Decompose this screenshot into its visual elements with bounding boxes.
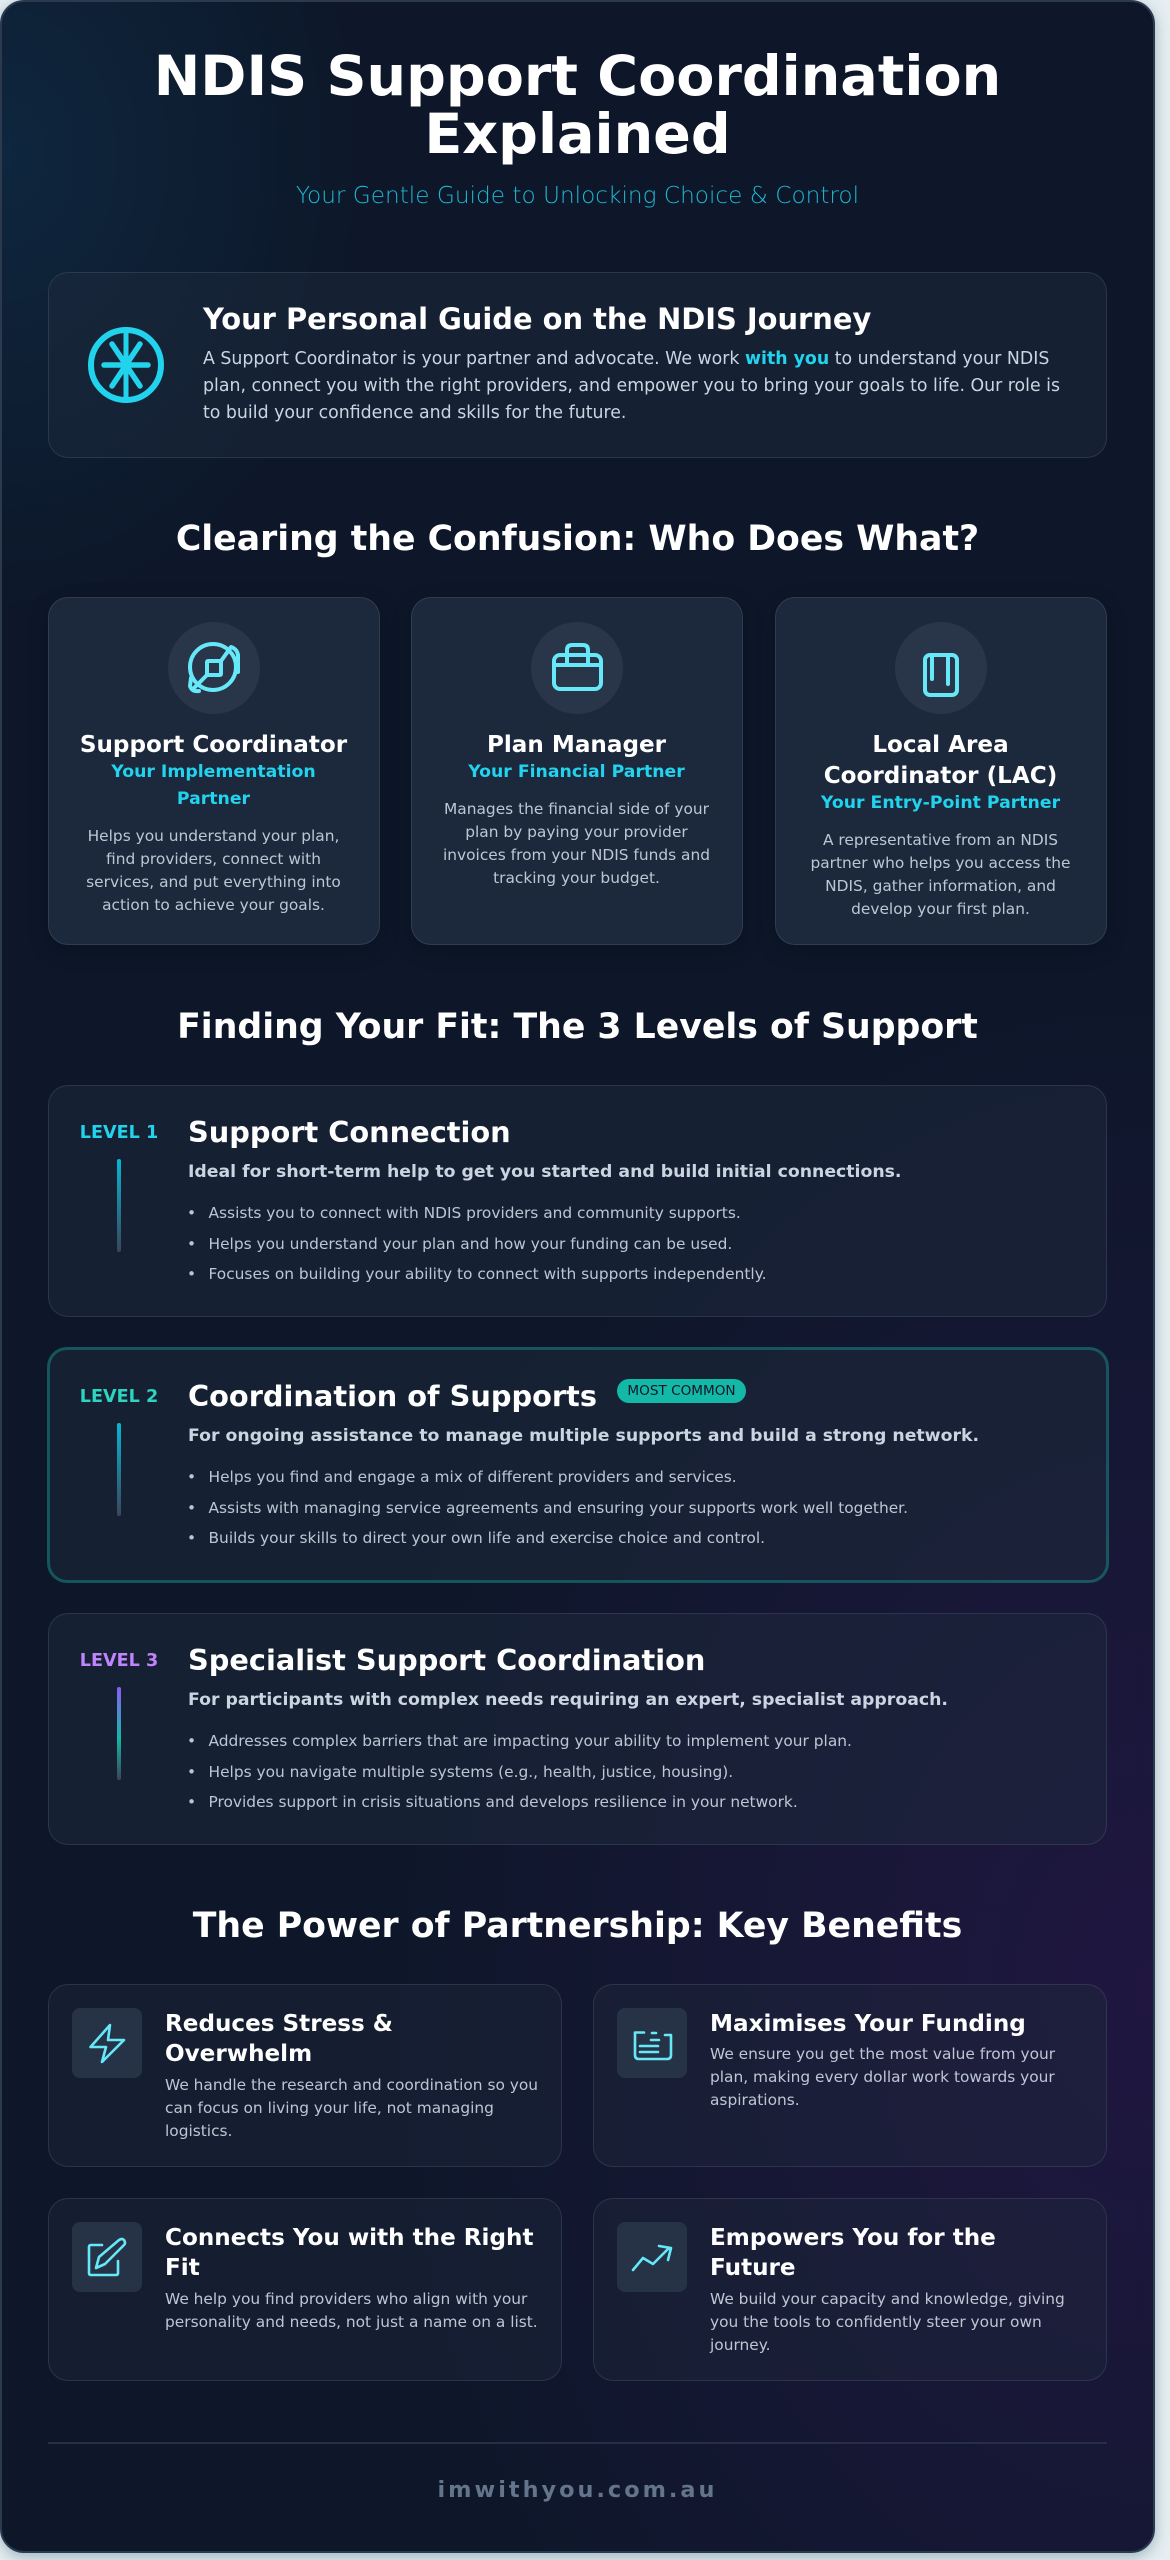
level bullet list xyxy=(187,1468,908,1547)
level bullet list xyxy=(187,1204,766,1283)
benefit description: We help you find providers who align with your xyxy=(165,2290,527,2308)
icon: trend arrow xyxy=(617,2222,687,2292)
level bullet list: Provides support in crisis situations and develops resilience in your network. xyxy=(208,1793,798,1811)
role tagline: Your Implementation xyxy=(111,762,316,782)
icon: lightning bolt xyxy=(72,2008,142,2078)
level bullet list: • xyxy=(187,1499,196,1517)
benefit description: plan, making every dollar work towards your xyxy=(710,2068,1055,2086)
role description: NDIS, gather information, and xyxy=(825,877,1056,895)
level bullet list: • xyxy=(187,1235,196,1253)
intro heading: Your Personal Guide on the NDIS Journey xyxy=(203,302,871,336)
level bullet list: • xyxy=(187,1793,196,1811)
level title: Support Connection xyxy=(188,1115,511,1149)
level bullet list: Assists with managing service agreements and ensuring your supports work well together. xyxy=(208,1499,908,1517)
panel: level 3 xyxy=(48,1613,1107,1845)
level bullet list: • xyxy=(187,1265,196,1283)
level label: LEVEL 3 xyxy=(80,1651,158,1671)
badge: most common xyxy=(617,1379,746,1403)
benefit description: aspirations. xyxy=(710,2091,800,2109)
benefit description xyxy=(165,2076,538,2140)
benefit description xyxy=(165,2290,538,2331)
panel: plan manager xyxy=(411,597,743,945)
role description: tracking your budget. xyxy=(493,869,660,887)
panel: benefit maximises funding xyxy=(593,1984,1107,2167)
icon: support asterisk wheel xyxy=(88,327,164,403)
role description: services, and put everything into xyxy=(86,873,341,891)
level connector bar xyxy=(117,1423,121,1516)
role description: Manages the financial side of your xyxy=(444,800,709,818)
level bullet list: Builds your skills to direct your own life and exercise choice and control. xyxy=(208,1529,765,1547)
benefit title: Fit xyxy=(165,2255,200,2281)
level bullet list: Assists you to connect with NDIS providers and community supports. xyxy=(208,1204,741,1222)
level bullet list: Addresses complex barriers that are impacting your ability to implement your plan. xyxy=(208,1732,852,1750)
badge: most common: MOST COMMON xyxy=(627,1383,736,1399)
benefit title: Overwhelm xyxy=(165,2041,312,2067)
role tagline: Your Financial Partner xyxy=(468,762,685,782)
benefit title: Connects You with the Right xyxy=(165,2225,534,2251)
role description: A representative from an NDIS xyxy=(823,831,1058,849)
benefit description: We build your capacity and knowledge, giving xyxy=(710,2290,1065,2308)
icon: support coordinator xyxy=(168,622,260,714)
benefit description: can focus on living your life, not managing xyxy=(165,2099,494,2117)
benefit title: Empowers You for the xyxy=(710,2225,996,2251)
title xyxy=(154,44,1001,167)
level title: Coordination of Supports xyxy=(188,1379,597,1413)
panel: benefit connects right fit xyxy=(48,2198,562,2381)
role description: plan by paying your provider xyxy=(465,823,688,841)
panel: level 1 xyxy=(48,1085,1107,1317)
panel: local area coordinator xyxy=(775,597,1107,945)
role name: Support Coordinator xyxy=(80,732,347,758)
level summary: For participants with complex needs requiring an expert, specialist approach. xyxy=(188,1690,948,1710)
role description xyxy=(810,831,1071,918)
role description: develop your first plan. xyxy=(851,900,1030,918)
footer website: imwithyou.com.au xyxy=(438,2477,717,2503)
level bullet list: • xyxy=(187,1763,196,1781)
intro body text: plan, connect you with the right providers, and empower you to bring your goals to life. Our role is xyxy=(203,376,1060,396)
panel: level 2 most common xyxy=(47,1347,1109,1583)
benefit description: you the tools to confidently steer your own xyxy=(710,2313,1042,2331)
section heading: key benefits: The Power of Partnership: Key Benefits xyxy=(193,1906,962,1946)
level bullet list: Focuses on building your ability to connect with supports independently. xyxy=(208,1265,766,1283)
panel: benefit empowers future xyxy=(593,2198,1107,2381)
level bullet list xyxy=(187,1732,852,1811)
level label: LEVEL 1 xyxy=(80,1123,158,1143)
icon: briefcase xyxy=(531,622,623,714)
level connector bar xyxy=(117,1159,121,1252)
role name: Coordinator (LAC) xyxy=(824,762,1057,788)
role tagline: Partner xyxy=(177,789,250,809)
role description: invoices from your NDIS funds and xyxy=(443,846,710,864)
benefit description: journey. xyxy=(710,2336,771,2354)
title: Explained xyxy=(424,102,731,167)
role description xyxy=(86,827,341,914)
benefit title: Reduces Stress & xyxy=(165,2011,393,2037)
level summary: For ongoing assistance to manage multiple supports and build a strong network. xyxy=(188,1426,979,1446)
intro body text: to build your confidence and skills for the future. xyxy=(203,403,626,423)
role description: Helps you understand your plan, xyxy=(88,827,339,845)
role description: action to achieve your goals. xyxy=(102,896,325,914)
level bullet list: • xyxy=(187,1529,196,1547)
benefit title: Maximises Your Funding xyxy=(710,2011,1026,2037)
role description xyxy=(443,800,710,887)
level connector bar xyxy=(117,1687,121,1780)
benefit description: We handle the research and coordination so you xyxy=(165,2076,538,2094)
role name: Local Area xyxy=(872,732,1009,758)
intro body text xyxy=(203,349,1060,423)
icon: pencil note xyxy=(72,2222,142,2292)
level bullet list: Helps you understand your plan and how your funding can be used. xyxy=(208,1235,732,1253)
level bullet list: • xyxy=(187,1468,196,1486)
panel: personal guide intro xyxy=(48,272,1107,458)
level bullet list: Helps you find and engage a mix of different providers and services. xyxy=(208,1468,737,1486)
benefit description: personality and needs, not just a name on a list. xyxy=(165,2313,538,2331)
role tagline xyxy=(111,762,316,809)
benefit title xyxy=(710,2225,996,2281)
section heading: who does what: Clearing the Confusion: Who Does What? xyxy=(176,519,979,559)
level bullet list: • xyxy=(187,1204,196,1222)
icon: funding card xyxy=(617,2008,687,2078)
benefit title xyxy=(165,2225,534,2281)
panel: support coordinator xyxy=(48,597,380,945)
level label: LEVEL 2 xyxy=(80,1387,158,1407)
level summary: Ideal for short-term help to get you started and build initial connections. xyxy=(188,1162,902,1182)
level bullet list: Helps you navigate multiple systems (e.g., health, justice, housing). xyxy=(208,1763,733,1781)
benefit title xyxy=(165,2011,393,2067)
intro body text: A Support Coordinator is your partner and advocate. We work with you to understand your NDIS xyxy=(203,349,1049,369)
role tagline: Your Entry-Point Partner xyxy=(821,793,1060,813)
role description: partner who helps you access the xyxy=(810,854,1071,872)
panel: benefit reduces stress xyxy=(48,1984,562,2167)
title: NDIS Support Coordination xyxy=(154,44,1001,109)
icon: local area coordinator card xyxy=(895,622,987,714)
level title: Specialist Support Coordination xyxy=(188,1643,705,1677)
benefit description: We ensure you get the most value from your xyxy=(710,2045,1055,2063)
benefit description: logistics. xyxy=(165,2122,232,2140)
benefit title: Future xyxy=(710,2255,796,2281)
role name: Plan Manager xyxy=(487,732,666,758)
role description: find providers, connect with xyxy=(106,850,321,868)
subtitle: Your Gentle Guide to Unlocking Choice & Control xyxy=(296,182,859,209)
role name xyxy=(824,732,1057,788)
benefit description xyxy=(710,2045,1056,2109)
level bullet list: • xyxy=(187,1732,196,1750)
section heading: levels of support: Finding Your Fit: The 3 Levels of Support xyxy=(177,1007,978,1047)
benefit description xyxy=(710,2290,1065,2354)
